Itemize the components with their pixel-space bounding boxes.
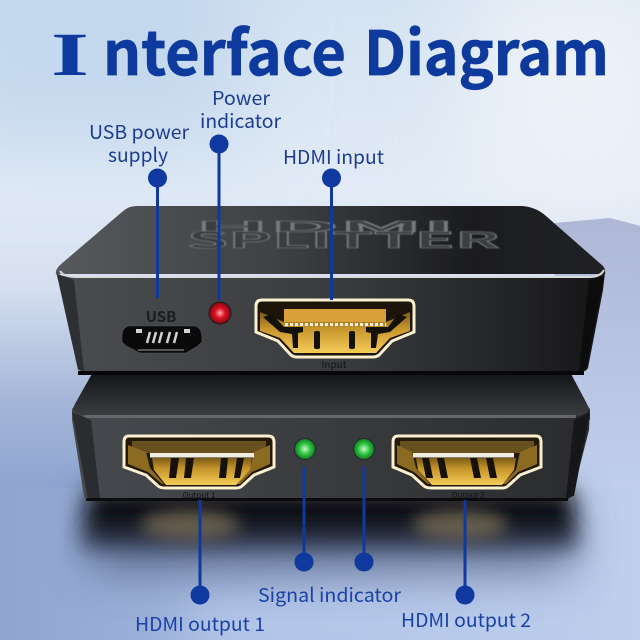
USB label: USB — [146, 306, 176, 327]
title: Diagram — [364, 4, 609, 93]
callout: USB power supply — [89, 118, 190, 298]
callout: Power indicator: Power — [212, 84, 271, 111]
callout: HDMI input: HDMI input — [283, 143, 384, 170]
callout: Power indicator — [200, 84, 282, 300]
callout: HDMI output 2 — [401, 500, 531, 633]
embossed logo: HDMI — [195, 216, 455, 237]
callout: USB power supply: supply — [108, 141, 168, 168]
callout: HDMI output 1: HDMI output 1 — [135, 610, 265, 637]
title — [51, 4, 609, 93]
lower splitter device — [72, 372, 590, 501]
callout: HDMI output 1 — [135, 500, 265, 637]
callout: Signal indicator: Signal indicator — [258, 581, 402, 608]
port: HDMI input — [256, 300, 414, 357]
label: Output 1: Output 1 — [183, 490, 215, 501]
micro USB port — [122, 326, 202, 353]
label: Output 2: Output 2 — [452, 490, 485, 501]
green LED left — [294, 438, 316, 460]
port: HDMI output 2 — [393, 436, 541, 488]
upper splitter device — [56, 206, 605, 375]
embossed logo — [187, 216, 500, 255]
callout: Power indicator: indicator — [200, 107, 282, 134]
callout: Signal indicator — [258, 467, 402, 608]
label: Input: Input — [321, 356, 347, 371]
title: I — [51, 22, 89, 89]
red power LED — [209, 302, 231, 324]
port: HDMI output 1 — [124, 436, 274, 488]
callout: HDMI input — [283, 143, 384, 300]
callout: USB power supply: USB power — [89, 118, 190, 145]
embossed logo: SPLITTER — [187, 223, 500, 255]
callout: HDMI output 2: HDMI output 2 — [401, 606, 531, 633]
green LED right — [354, 438, 374, 460]
reflection under device — [82, 490, 578, 570]
title: nterface — [103, 4, 346, 93]
